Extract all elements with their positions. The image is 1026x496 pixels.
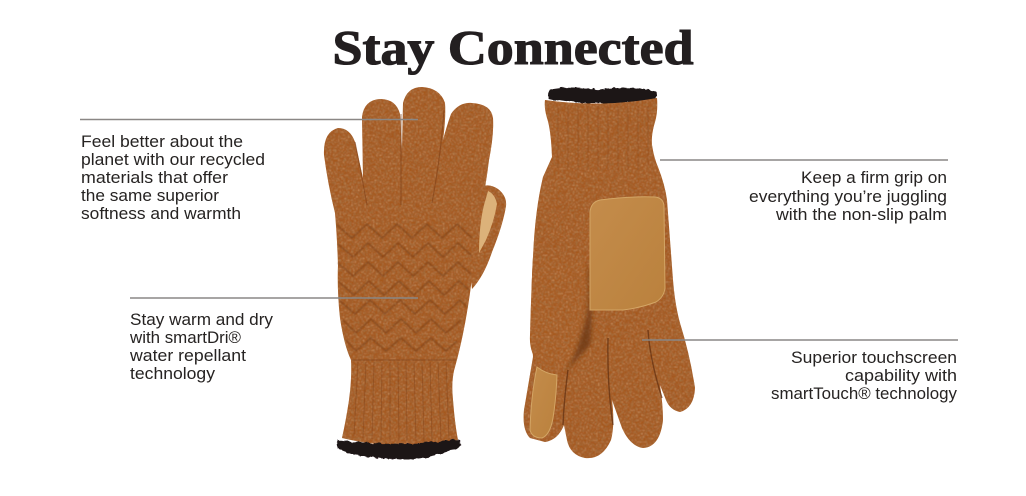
callout: recycled materials — [80, 120, 418, 223]
callout text: with smartDri® — [129, 329, 241, 347]
finger separations — [563, 330, 662, 425]
thumb shadow — [562, 262, 592, 376]
ribbed cuff — [352, 360, 456, 441]
callout text: softness and warmth — [81, 205, 241, 223]
callout text: Superior touchscreen — [791, 349, 957, 367]
callout text: technology — [130, 365, 216, 383]
callout: smartDri — [129, 298, 418, 383]
callout text: materials that offer — [81, 169, 229, 187]
left glove: back of hand — [324, 87, 506, 460]
leader line — [660, 159, 948, 161]
leader line — [80, 118, 418, 120]
callout text: the same superior — [81, 187, 220, 205]
callout text — [129, 311, 274, 383]
fleece trim — [337, 439, 460, 460]
callout text — [81, 133, 265, 223]
touchscreen fingertip leather — [530, 367, 557, 438]
leader line — [130, 297, 418, 299]
title: Stay Connected — [332, 20, 694, 75]
callout text: Keep a firm grip on — [801, 169, 947, 187]
callout text — [749, 169, 947, 224]
finger gaps — [355, 110, 444, 205]
callout text: with the non-slip palm — [775, 206, 947, 224]
knit glove body — [324, 87, 493, 446]
leader line — [642, 339, 958, 341]
folded thumb — [530, 257, 585, 373]
cuff ribbing — [558, 106, 648, 170]
far fingers and palm — [524, 98, 695, 458]
callout text: planet with our recycled — [81, 151, 265, 169]
callout: smartTouch — [642, 340, 958, 403]
fleece trim — [548, 88, 657, 104]
chevron knit pattern — [337, 224, 472, 351]
non-slip palm patch — [590, 197, 665, 310]
thumb behind the left glove — [468, 185, 506, 289]
callout text: smartTouch® technology — [771, 385, 958, 403]
callout text: Stay warm and dry — [130, 311, 274, 329]
callout text: Feel better about the — [81, 133, 243, 151]
callout text: everything you’re juggling — [749, 188, 947, 206]
callout text: capability with — [845, 367, 957, 385]
callout text: water repellant — [129, 347, 246, 365]
right glove: palm side — [524, 88, 695, 458]
callout text — [771, 349, 958, 403]
callout: non-slip palm — [660, 160, 948, 224]
